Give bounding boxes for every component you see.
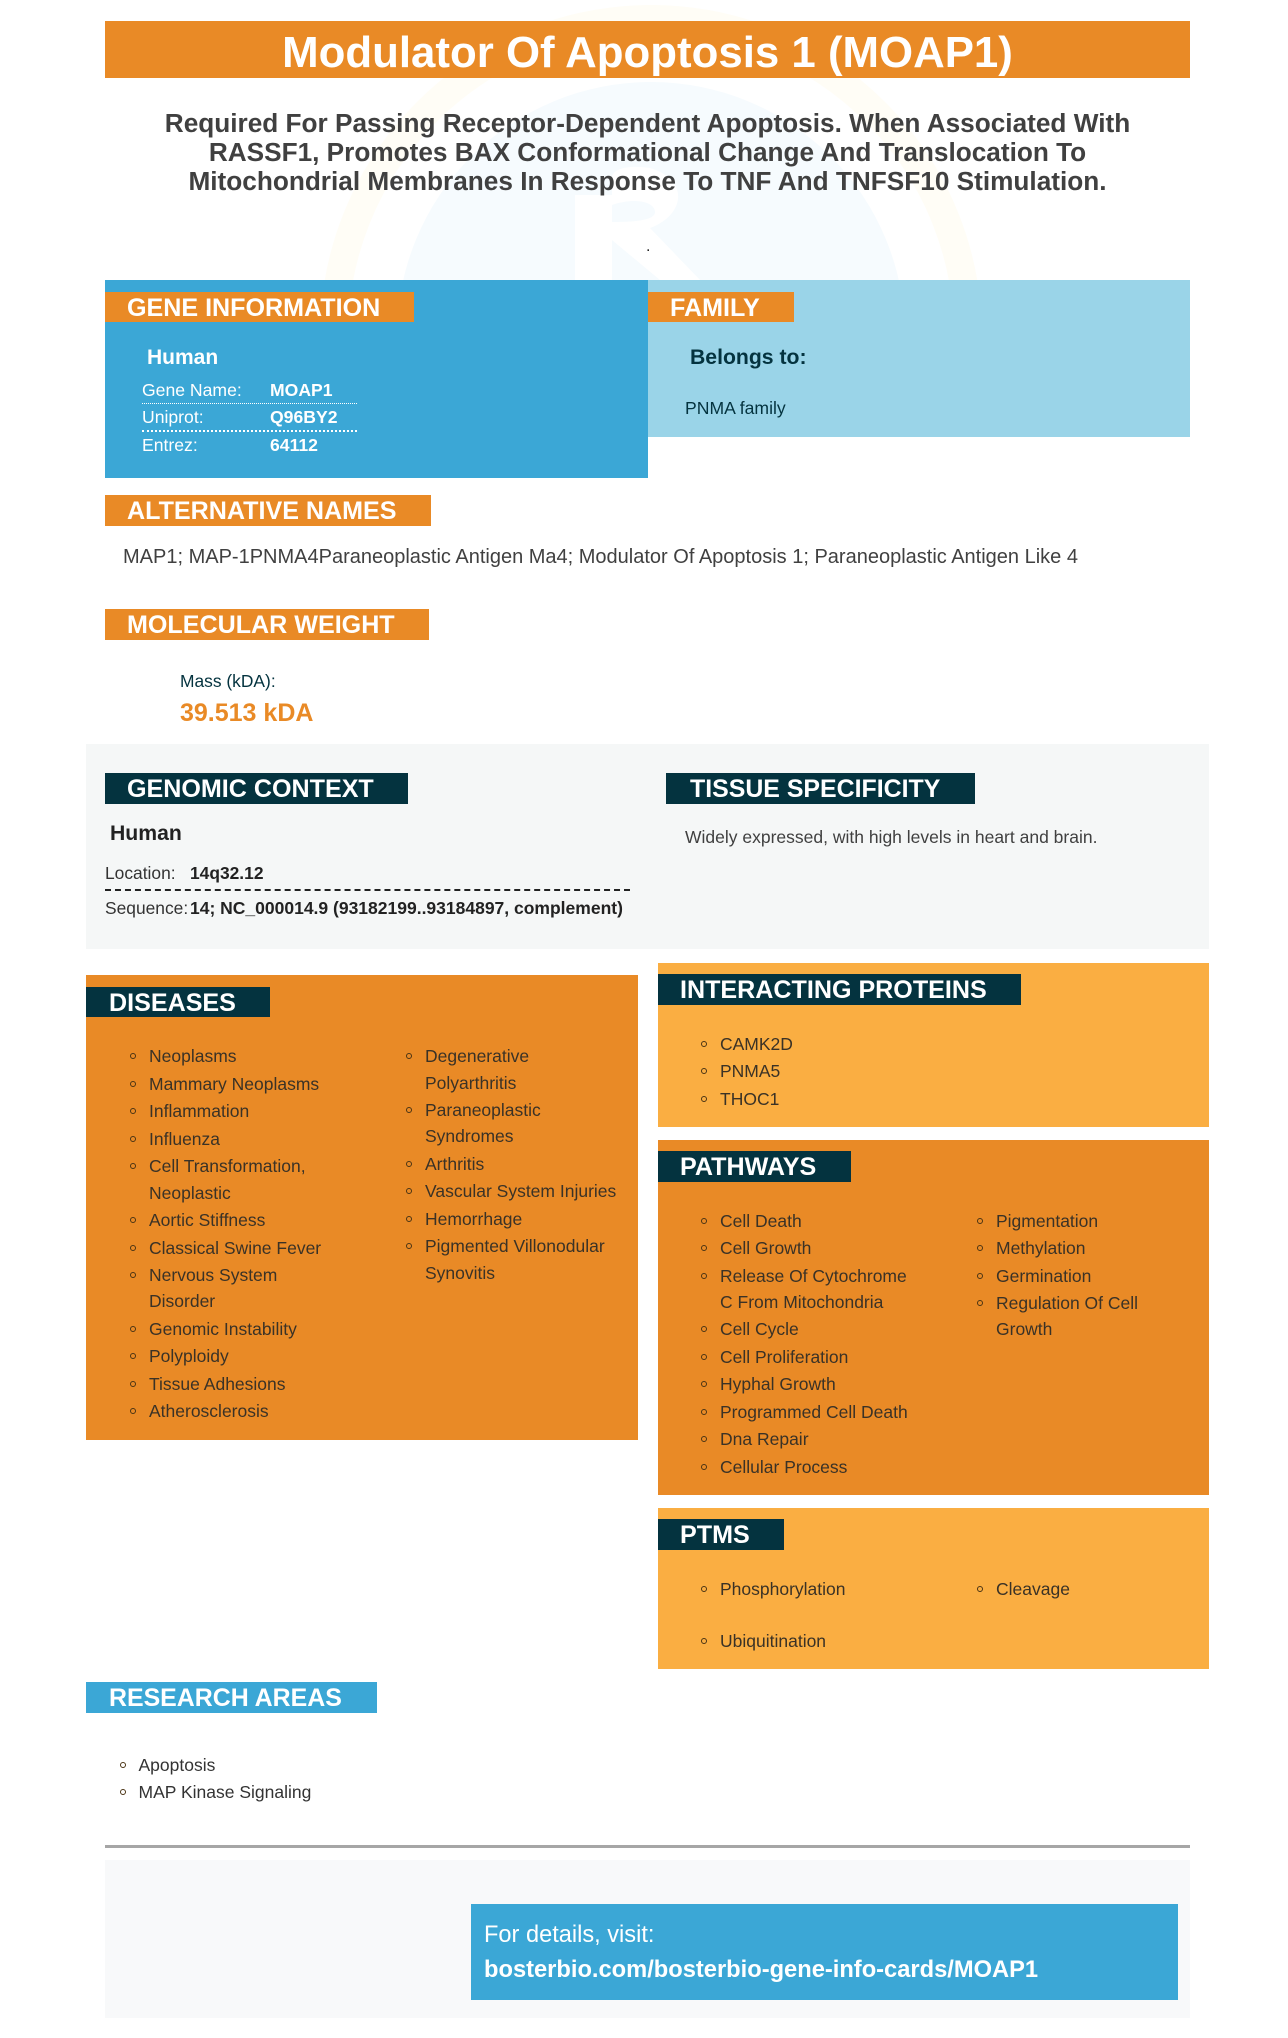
heading: diseases (86, 987, 270, 1017)
description: Required For Passing Receptor-Dependent Apoptosis. When Associated With (165, 108, 1130, 138)
PTMs list column 1: Ubiquitination (720, 1631, 826, 1651)
mass value: 39.513 kDA (180, 699, 313, 727)
diseases list column 1: Disorder (149, 1291, 215, 1311)
alternative names text: MAP1; MAP-1PNMA4Paraneoplastic Antigen Ma4; Modulator Of Apoptosis 1; Paraneoplastic Antigen Like 4 (123, 546, 1078, 568)
pathways list column 1: Cell Proliferation (720, 1347, 848, 1367)
pathways list column 2: Methylation (996, 1238, 1086, 1258)
diseases list column 2: Degenerative (425, 1046, 529, 1066)
panel: diseases (86, 975, 638, 1440)
research areas list (120, 1755, 311, 1802)
interacting proteins list (701, 1034, 793, 1109)
panel: pathways (658, 1140, 1209, 1495)
pathways list column 2: Growth (996, 1319, 1052, 1339)
callout: details link (471, 1904, 1178, 2000)
heading: molecular weight: MOLECULAR WEIGHT (127, 611, 395, 639)
panel: PTMs (658, 1508, 1209, 1669)
pathways list column 1: Cell Cycle (720, 1319, 799, 1339)
description (165, 108, 1130, 196)
diseases list column 1: Atherosclerosis (149, 1401, 269, 1421)
interacting proteins list: CAMK2D (720, 1034, 793, 1054)
pathways list column 2 (977, 1211, 1138, 1339)
panel: genomic context and tissue specificity (86, 744, 1209, 949)
description: Mitochondrial Membranes In Response To TNF And TNFSF10 Stimulation. (188, 166, 1107, 196)
diseases list column 1: Classical Swine Fever (149, 1238, 321, 1258)
gene fields: Q96BY2 (270, 407, 337, 427)
research areas list: Apoptosis (138, 1755, 215, 1775)
diseases list column 2: Pigmented Villonodular (425, 1236, 605, 1256)
diseases list column 1: Aortic Stiffness (149, 1210, 265, 1230)
heading: diseases: DISEASES (109, 989, 236, 1017)
diseases list column 1: Neoplastic (149, 1183, 231, 1203)
research areas list: MAP Kinase Signaling (138, 1782, 311, 1802)
gene fields (142, 380, 357, 455)
diseases list column 1: Polyploidy (149, 1346, 229, 1366)
diseases list column 2: Hemorrhage (425, 1209, 522, 1229)
pathways list column 1: Dna Repair (720, 1429, 809, 1449)
diseases list column 2: Paraneoplastic (425, 1100, 541, 1120)
heading: gene information: GENE INFORMATION (127, 294, 380, 322)
diseases list column 2: Vascular System Injuries (425, 1181, 616, 1201)
heading: PTMs (658, 1519, 784, 1550)
genomic location: 14; NC_000014.9 (93182199..93184897, complement) (190, 898, 623, 918)
small dot: . (646, 238, 650, 255)
species label: Human (147, 346, 218, 369)
gene fields: 64112 (270, 435, 318, 455)
panel: interacting proteins (658, 963, 1209, 1127)
heading: family: FAMILY (670, 294, 760, 322)
title banner: Modulator Of Apoptosis 1 (MOAP1) (282, 28, 1013, 77)
genomic location: Location: (105, 863, 176, 883)
genomic location: 14q32.12 (190, 863, 264, 883)
pathways list column 1: Cellular Process (720, 1457, 847, 1477)
genomic location (105, 863, 630, 918)
diseases list column 1: Influenza (149, 1129, 220, 1149)
heading: PTMs: PTMS (680, 1521, 750, 1549)
pathways list column 1: Programmed Cell Death (720, 1402, 908, 1422)
pathways list column 1: Release Of Cytochrome (720, 1266, 907, 1286)
heading: pathways: PATHWAYS (680, 1153, 816, 1181)
watermark logo (325, 5, 977, 280)
diseases list column 1: Inflammation (149, 1101, 249, 1121)
title banner (105, 21, 1190, 78)
pathways list column 1: Hyphal Growth (720, 1374, 836, 1394)
diseases list column 1: Mammary Neoplasms (149, 1074, 319, 1094)
gene fields: Entrez: (142, 435, 198, 455)
family value: PNMA family (685, 398, 786, 418)
pathways list column 1: Cell Growth (720, 1238, 811, 1258)
pathways list column 2: Pigmentation (996, 1211, 1098, 1231)
PTMs list column 1 (701, 1579, 846, 1651)
PTMs list column 2: Cleavage (996, 1579, 1070, 1599)
heading: alternative names: ALTERNATIVE NAMES (127, 497, 397, 525)
genomic location: Sequence: (105, 898, 188, 918)
heading: genomic context: GENOMIC CONTEXT (127, 775, 374, 803)
pathways list column 2: Germination (996, 1266, 1091, 1286)
heading: interacting proteins: INTERACTING PROTEINS (680, 976, 987, 1004)
PTMs list column 1: Phosphorylation (720, 1579, 846, 1599)
diseases list column 1 (130, 1046, 321, 1421)
diseases list column 1: Tissue Adhesions (149, 1374, 286, 1394)
details label: For details, visit: (484, 1922, 654, 1948)
diseases list column 1: Genomic Instability (149, 1319, 297, 1339)
diseases list column 2: Syndromes (425, 1126, 514, 1146)
heading: family (648, 292, 794, 322)
pathways list column 1: Cell Death (720, 1211, 802, 1231)
mass label: Mass (kDA): (180, 671, 276, 691)
belongs to label: Belongs to: (690, 346, 807, 369)
pathways list column 2: Regulation Of Cell (996, 1293, 1138, 1313)
interacting proteins list: THOC1 (720, 1089, 779, 1109)
diseases list column 2: Synovitis (425, 1263, 495, 1283)
diseases list column 2: Polyarthritis (425, 1073, 516, 1093)
interacting proteins list: PNMA5 (720, 1061, 780, 1081)
pathways list column 1: C From Mitochondria (720, 1292, 883, 1312)
diseases list column 1: Neoplasms (149, 1046, 237, 1066)
tissue specificity text: Widely expressed, with high levels in heart and brain. (685, 827, 1097, 847)
gene fields: Gene Name: (142, 380, 242, 400)
heading: pathways (658, 1151, 851, 1182)
diseases list column 1: Cell Transformation, (149, 1156, 306, 1176)
description: RASSF1, Promotes BAX Conformational Change And Translocation To (209, 137, 1086, 167)
panel: footer (105, 1860, 1190, 2018)
heading: tissue specificity: TISSUE SPECIFICITY (690, 775, 940, 803)
pathways list column 1 (701, 1211, 908, 1477)
diseases list column 2: Arthritis (425, 1154, 484, 1174)
gene fields: Uniprot: (142, 407, 204, 427)
species label: Human (110, 822, 182, 845)
diseases list column 2 (406, 1046, 616, 1283)
panel: gene information (105, 280, 648, 478)
panel: family (648, 280, 1190, 437)
details url: bosterbio.com/bosterbio-gene-info-cards/MOAP1 (484, 1957, 1038, 1983)
gene fields: MOAP1 (270, 380, 333, 400)
diseases list column 1: Nervous System (149, 1265, 277, 1285)
heading: research areas: RESEARCH AREAS (109, 1684, 342, 1712)
